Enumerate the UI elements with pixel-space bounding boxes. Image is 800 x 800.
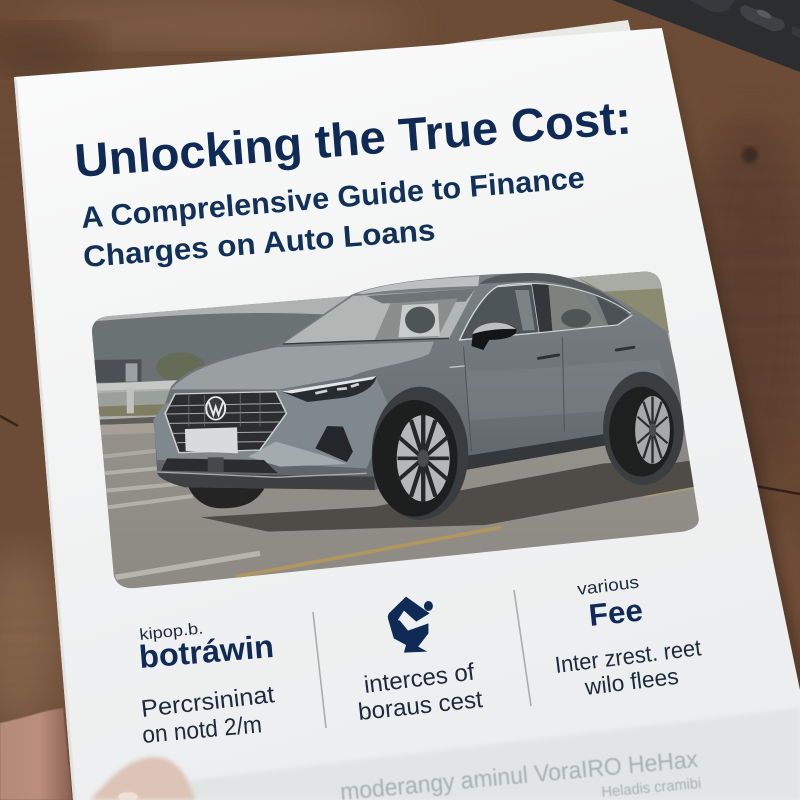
keyboard corner: [612, 0, 800, 72]
subtitle: [80, 162, 586, 274]
grille: [165, 392, 286, 453]
column 2: icon and interest text: interces of: [362, 659, 476, 699]
side sill: [462, 432, 622, 470]
column 3: fee: Inter zrest. reet: [553, 634, 703, 678]
car: [153, 273, 684, 520]
badge: [206, 397, 225, 420]
column 3: fee: [553, 573, 703, 700]
footer band: [190, 708, 800, 800]
fog vent: [315, 426, 353, 462]
column 1: borrowing: Percrsininat: [140, 681, 276, 723]
finger behind the page edge: [0, 708, 72, 800]
column 1: borrowing: botráwin: [138, 628, 275, 675]
rear wheel: [603, 372, 684, 485]
column 2: icon and interest text: [357, 597, 484, 726]
thumb on the page: [90, 757, 195, 800]
number plate: [185, 427, 238, 453]
rear sheet of paper: [440, 20, 632, 45]
lower bumper: [161, 458, 278, 473]
hand holding the page: [0, 708, 195, 800]
divider right: [514, 590, 531, 706]
subtitle: A Comprelensive Guide to Finance: [80, 162, 586, 235]
car photo: [90, 260, 722, 593]
divider left: [313, 612, 326, 728]
subtitle: Charges on Auto Loans: [82, 214, 436, 274]
car body: [154, 274, 682, 490]
column 3: fee: various: [576, 573, 640, 599]
column 3: fee: Fee: [587, 593, 644, 633]
headlight: [282, 376, 377, 402]
windshield: [284, 288, 475, 343]
fender badge: [450, 366, 465, 367]
roof rail: [357, 276, 479, 294]
column 2: icon and interest text: boraus cest: [357, 686, 484, 726]
front wheel: [372, 387, 468, 520]
hood: [171, 342, 434, 389]
door handles: [539, 355, 558, 358]
photo backdrop: [90, 260, 722, 593]
column 3: fee: wilo flees: [582, 663, 680, 700]
icon: finance symbol: [388, 597, 433, 653]
far-side front tyre: [187, 483, 267, 508]
column 1: borrowing: kipop.b.: [139, 620, 204, 644]
side mirror: [471, 323, 516, 350]
paper shadow on table: [640, 40, 800, 800]
column 1: borrowing: on notd 2/m: [141, 711, 263, 749]
side windows: [460, 284, 539, 340]
title: Unlocking the True Cost:: [73, 90, 633, 187]
column 1: borrowing: [138, 620, 276, 749]
body shading: [466, 360, 675, 420]
